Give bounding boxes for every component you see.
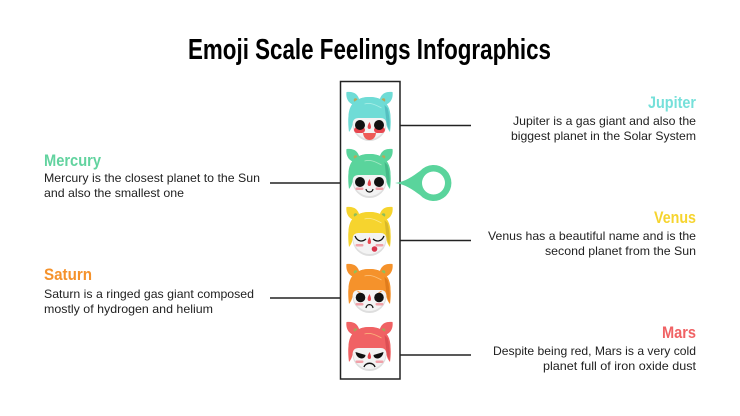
text block: Mercury [44, 151, 260, 200]
connector: Venus [400, 240, 471, 242]
text block: Mars: Despite being red, Mars is a very cold [493, 344, 696, 358]
text block: Venus: Venus [654, 208, 696, 227]
text block: Saturn: Saturn [44, 265, 92, 284]
text block: Mars: planet full of iron oxide dust [543, 359, 697, 373]
icon: face, happy (Jupiter) [346, 92, 393, 141]
text block: Mercury: Mercury [44, 151, 101, 170]
text block: Saturn [44, 265, 254, 316]
connector: Jupiter [400, 124, 471, 126]
scale frame [340, 82, 400, 379]
text block: Mercury: and also the smallest one [44, 186, 184, 200]
text block: Saturn: Saturn is a ringed gas giant composed [44, 287, 254, 301]
icon: face, calm (Venus) [346, 207, 393, 256]
text block: Mars: Mars [662, 323, 696, 342]
text block: Venus [488, 208, 696, 258]
icon: face, smiling (Mercury) [346, 149, 393, 198]
icon: face, angry (Mars) [346, 322, 393, 371]
text block: Mercury: Mercury is the closest planet to the Sun [44, 171, 260, 185]
connector: Mars [400, 354, 471, 356]
icon: face, sad (Saturn) [346, 264, 393, 313]
text block: Mars [493, 323, 697, 373]
text block: Saturn: mostly of hydrogen and helium [44, 302, 213, 316]
text block: Jupiter: Jupiter is a gas giant and also the [513, 114, 696, 128]
icon: map pin pointer [395, 165, 451, 201]
text block: Venus: Venus has a beautiful name and is the [488, 229, 696, 243]
text block: Venus: second planet from the Sun [545, 244, 696, 258]
title: Emoji Scale Feelings Infographics [188, 34, 551, 66]
connector: Mercury [270, 182, 340, 184]
text block: Jupiter: biggest planet in the Solar System [511, 129, 696, 143]
text block: Jupiter: Jupiter [648, 93, 696, 112]
connector: Saturn [270, 297, 340, 299]
text block: Jupiter [511, 93, 696, 143]
